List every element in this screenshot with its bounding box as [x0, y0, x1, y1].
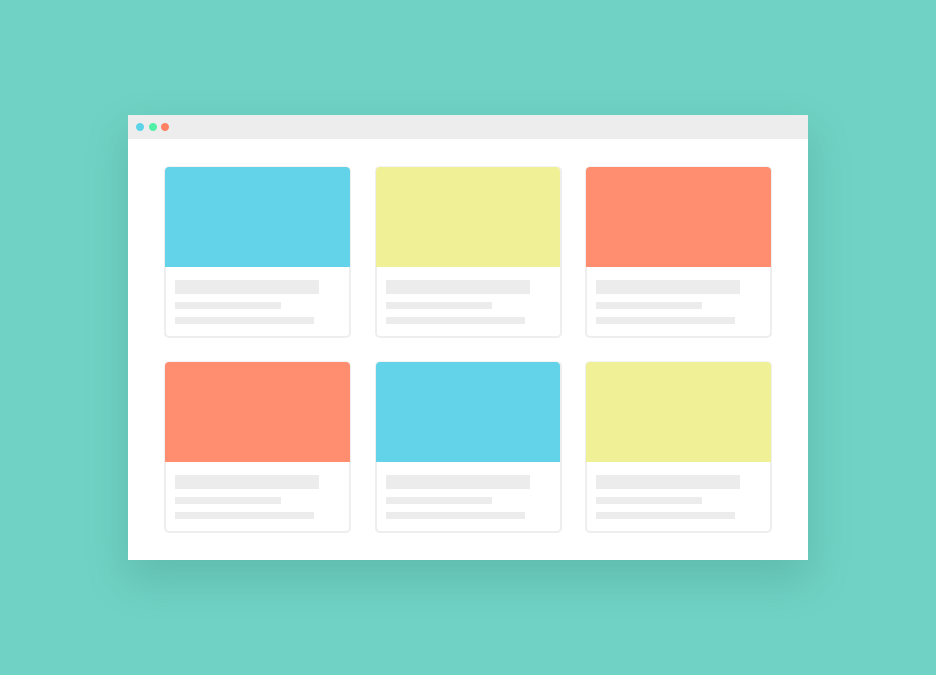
card 6: yellow [585, 361, 772, 533]
window control: blue dot [136, 123, 144, 131]
subtitle placeholder [596, 497, 702, 504]
heading placeholder [596, 280, 740, 294]
text placeholder [175, 512, 314, 519]
card 3: red [585, 166, 772, 338]
text placeholder [386, 512, 525, 519]
card 5: blue [375, 361, 562, 533]
heading placeholder [386, 280, 530, 294]
heading placeholder [386, 475, 530, 489]
subtitle placeholder [596, 302, 702, 309]
subtitle placeholder [386, 497, 492, 504]
heading placeholder [596, 475, 740, 489]
heading placeholder [175, 475, 319, 489]
card image [586, 362, 771, 462]
text placeholder [596, 317, 735, 324]
subtitle placeholder [175, 302, 281, 309]
card image [376, 362, 560, 462]
card image [376, 167, 560, 267]
title bar [128, 115, 808, 139]
subtitle placeholder [386, 302, 492, 309]
card 2: yellow [375, 166, 562, 338]
window control: red dot [161, 123, 169, 131]
card image [165, 362, 350, 462]
card image [165, 167, 350, 267]
text placeholder [596, 512, 735, 519]
browser window [128, 115, 808, 560]
subtitle placeholder [175, 497, 281, 504]
card image [586, 167, 771, 267]
text placeholder [175, 317, 314, 324]
window control: green dot [149, 123, 157, 131]
heading placeholder [175, 280, 319, 294]
card 4: red [164, 361, 351, 533]
card 1: blue [164, 166, 351, 338]
text placeholder [386, 317, 525, 324]
